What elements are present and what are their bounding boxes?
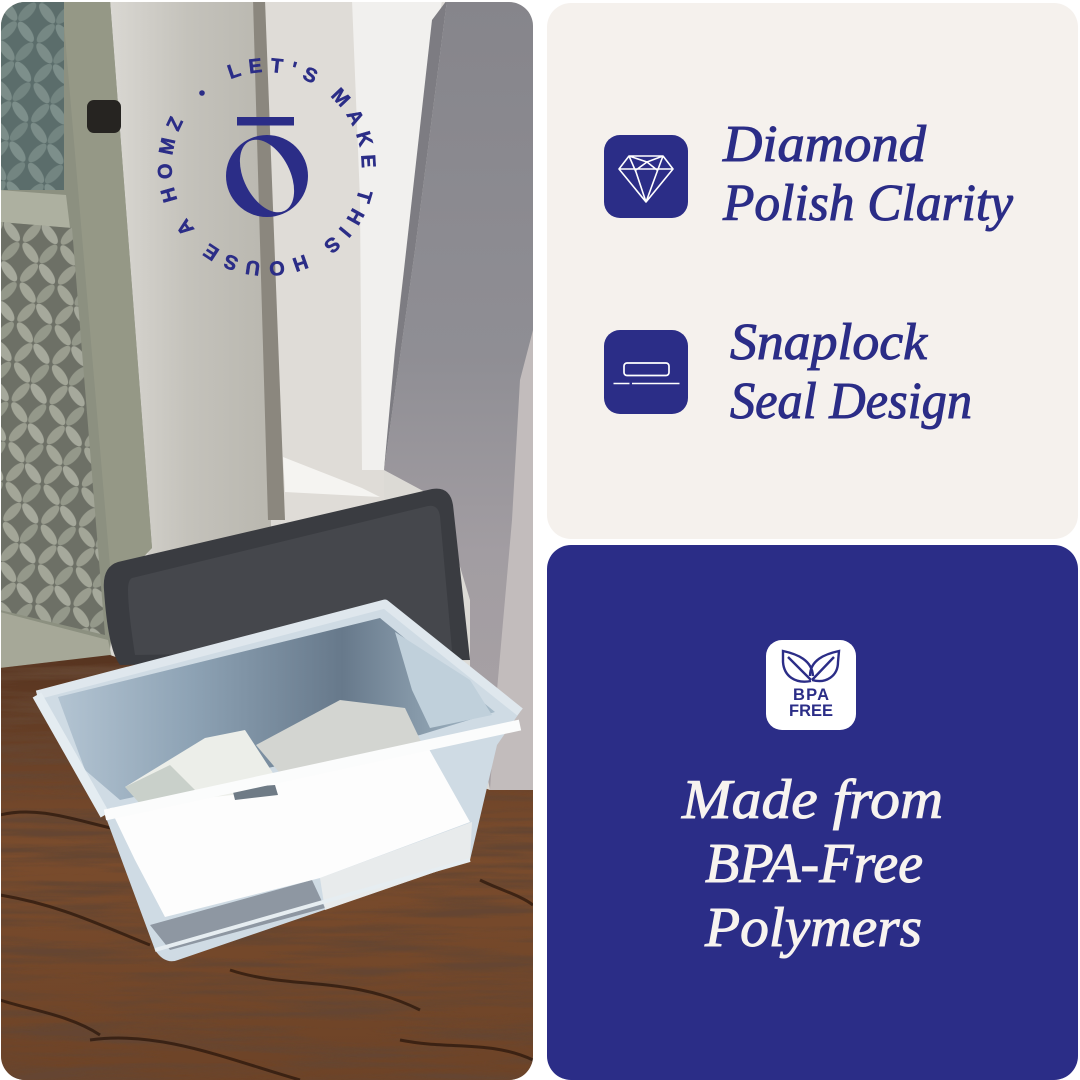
icon: BPA free leaves: BPA [793,686,829,704]
heading: made from BPA-free polymers: Made from [681,769,943,831]
cabinet with lattice panels [0,0,152,678]
panel: BPA free [547,545,1078,1080]
icon: snaplock [604,330,688,414]
grey curtain [384,0,533,790]
slogan dot [199,90,205,96]
clear plastic bin [37,604,520,961]
panel: features [547,3,1078,539]
heading: diamond polish clarity [722,116,1014,232]
heading: made from BPA-free polymers [681,769,943,959]
icon: diamond [604,135,688,218]
circular slogan: LET'S MAKE THIS HOUSE A HOMZ [158,58,376,276]
wooden floor [0,655,533,1080]
brand badge [158,58,376,276]
heading: snaplock seal design: Snaplock [730,314,928,371]
storage lid [104,489,470,665]
heading: snaplock seal design [730,314,972,430]
logo ring [226,135,308,217]
heading: made from BPA-free polymers: Polymers [704,897,922,959]
heading: diamond polish clarity: Diamond [722,116,927,173]
icon: BPA free leaves: FREE [789,702,833,720]
heading: diamond polish clarity: Polish Clarity [722,175,1014,232]
heading: made from BPA-free polymers: BPA-Free [705,833,923,895]
heading: snaplock seal design: Seal Design [730,373,972,430]
white door panels [129,2,442,555]
photo: storage bin in front of a cabinet and door [1,2,533,1080]
logo bar [237,117,294,126]
icon: BPA free leaves [766,640,856,730]
